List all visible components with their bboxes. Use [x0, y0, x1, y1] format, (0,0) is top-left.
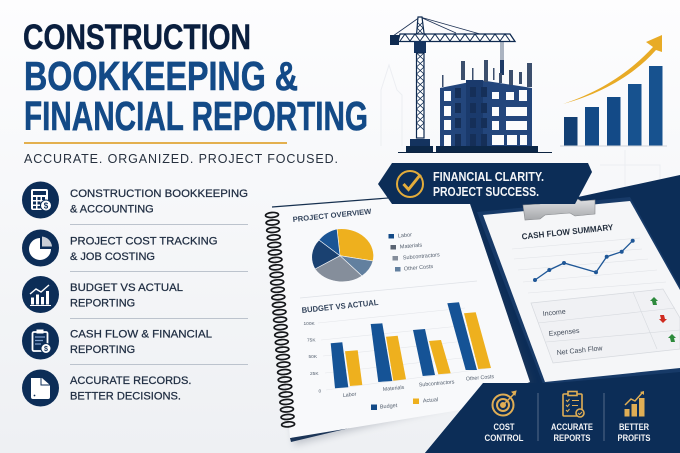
pie legend: Other Costs	[404, 264, 434, 272]
title: FINANCIAL REPORTING	[24, 93, 368, 139]
faint skyline behind crane	[381, 65, 660, 190]
pie legend: Materials	[400, 243, 423, 250]
benefit: cost control	[484, 391, 524, 444]
text	[70, 188, 248, 216]
benefit: cost control: CONTROL	[484, 433, 524, 444]
list item: records	[22, 370, 192, 406]
budget chart: 25K	[310, 371, 319, 377]
text: REPORTING	[70, 344, 135, 356]
icon: gold check	[397, 171, 423, 197]
notebook shadow	[276, 200, 532, 445]
icon: rising chart	[22, 276, 59, 313]
budget chart: Subcontractors	[419, 379, 455, 388]
list item: cash flow	[22, 322, 212, 360]
table: cash flow rows: Income	[542, 309, 566, 318]
title: BOOKKEEPING &	[24, 53, 298, 99]
text: CASH FLOW & FINANCIAL	[70, 328, 212, 340]
budget chart: Materials	[383, 385, 405, 393]
text: PROJECT COST TRACKING	[70, 236, 218, 248]
budget chart: 100K	[304, 321, 316, 327]
benefit: accurate reports: ACCURATE	[551, 422, 593, 433]
benefit: accurate reports	[551, 392, 593, 444]
table: cash flow rows: Expenses	[548, 328, 580, 338]
benefit: better profits	[618, 391, 650, 444]
chart legend: Budget	[380, 403, 398, 410]
bottom benefits panel	[425, 383, 680, 453]
benefit: better profits: BETTER	[619, 422, 649, 433]
text: CONSTRUCTION BOOKKEEPING	[70, 188, 248, 200]
pie legend	[388, 232, 440, 272]
icon: profit bars	[624, 391, 644, 416]
icon: target	[492, 391, 516, 416]
budget chart: Labor	[343, 392, 357, 399]
text: & ACCOUNTING	[70, 204, 154, 216]
list item: bookkeeping	[22, 182, 248, 218]
arrow: growth trend	[563, 35, 662, 104]
title	[23, 18, 368, 139]
text	[70, 375, 192, 402]
table: cash flow rows: Net Cash Flow	[556, 345, 604, 357]
budget chart: 50K	[308, 354, 318, 360]
benefit: better profits: PROFITS	[618, 433, 650, 444]
icon: document	[22, 370, 59, 406]
budget chart: Other Costs	[466, 374, 495, 382]
growth bar chart	[560, 35, 667, 146]
pie legend: Subcontractors	[403, 252, 440, 261]
banner: financial clarity: PROJECT SUCCESS.	[433, 185, 539, 199]
text: BUDGET VS ACTUAL	[70, 282, 183, 294]
text	[70, 236, 218, 263]
icon: clipboard with dollar: $	[44, 346, 48, 353]
banner: financial clarity	[378, 163, 592, 204]
line chart	[533, 239, 635, 282]
icon: clipboard with dollar	[22, 322, 59, 360]
heading: cash flow summary: CASH FLOW SUMMARY	[521, 222, 614, 241]
pie legend: Labor	[398, 232, 412, 239]
subtitle: ACCURATE. ORGANIZED. PROJECT FOCUSED.	[24, 152, 338, 166]
building under construction	[398, 60, 552, 153]
text: REPORTING	[70, 298, 135, 310]
icon: pie chart	[22, 230, 59, 266]
navy backdrop panel	[425, 175, 680, 453]
crane	[390, 17, 515, 152]
icon: green up arrow	[650, 297, 658, 305]
banner: financial clarity: FINANCIAL CLARITY.	[433, 170, 544, 184]
service list	[22, 182, 248, 406]
text	[70, 282, 183, 310]
budget chart: 75K	[307, 338, 316, 344]
list item: cost tracking	[22, 230, 218, 266]
icon: calculator	[22, 182, 59, 218]
benefit: cost control: COST	[494, 422, 515, 433]
text: ACCURATE RECORDS.	[70, 375, 192, 387]
budget chart: 0	[318, 388, 322, 394]
icon: red down arrow	[659, 315, 667, 323]
icon: calculator: $	[44, 202, 49, 210]
icon: green up arrow	[668, 334, 676, 342]
chart legend: Actual	[423, 397, 438, 404]
chart legend	[371, 397, 438, 410]
heading: project overview: PROJECT OVERVIEW	[292, 207, 373, 224]
spiral binding	[265, 212, 295, 427]
list item: budget vs actual	[22, 276, 183, 313]
text	[70, 328, 212, 356]
gold rule under title	[24, 142, 287, 144]
heading: budget vs actual: BUDGET VS ACTUAL	[301, 298, 379, 315]
clipboard	[477, 197, 680, 384]
table: cash flow rows	[531, 289, 680, 363]
benefit: accurate reports: REPORTS	[554, 433, 590, 444]
text: & JOB COSTING	[70, 251, 155, 263]
text: BETTER DECISIONS.	[70, 390, 181, 402]
title: CONSTRUCTION	[23, 18, 251, 57]
icon: checklist clipboard	[563, 392, 584, 417]
budget chart	[304, 302, 495, 410]
pie chart	[312, 229, 374, 282]
notebook	[265, 192, 530, 442]
